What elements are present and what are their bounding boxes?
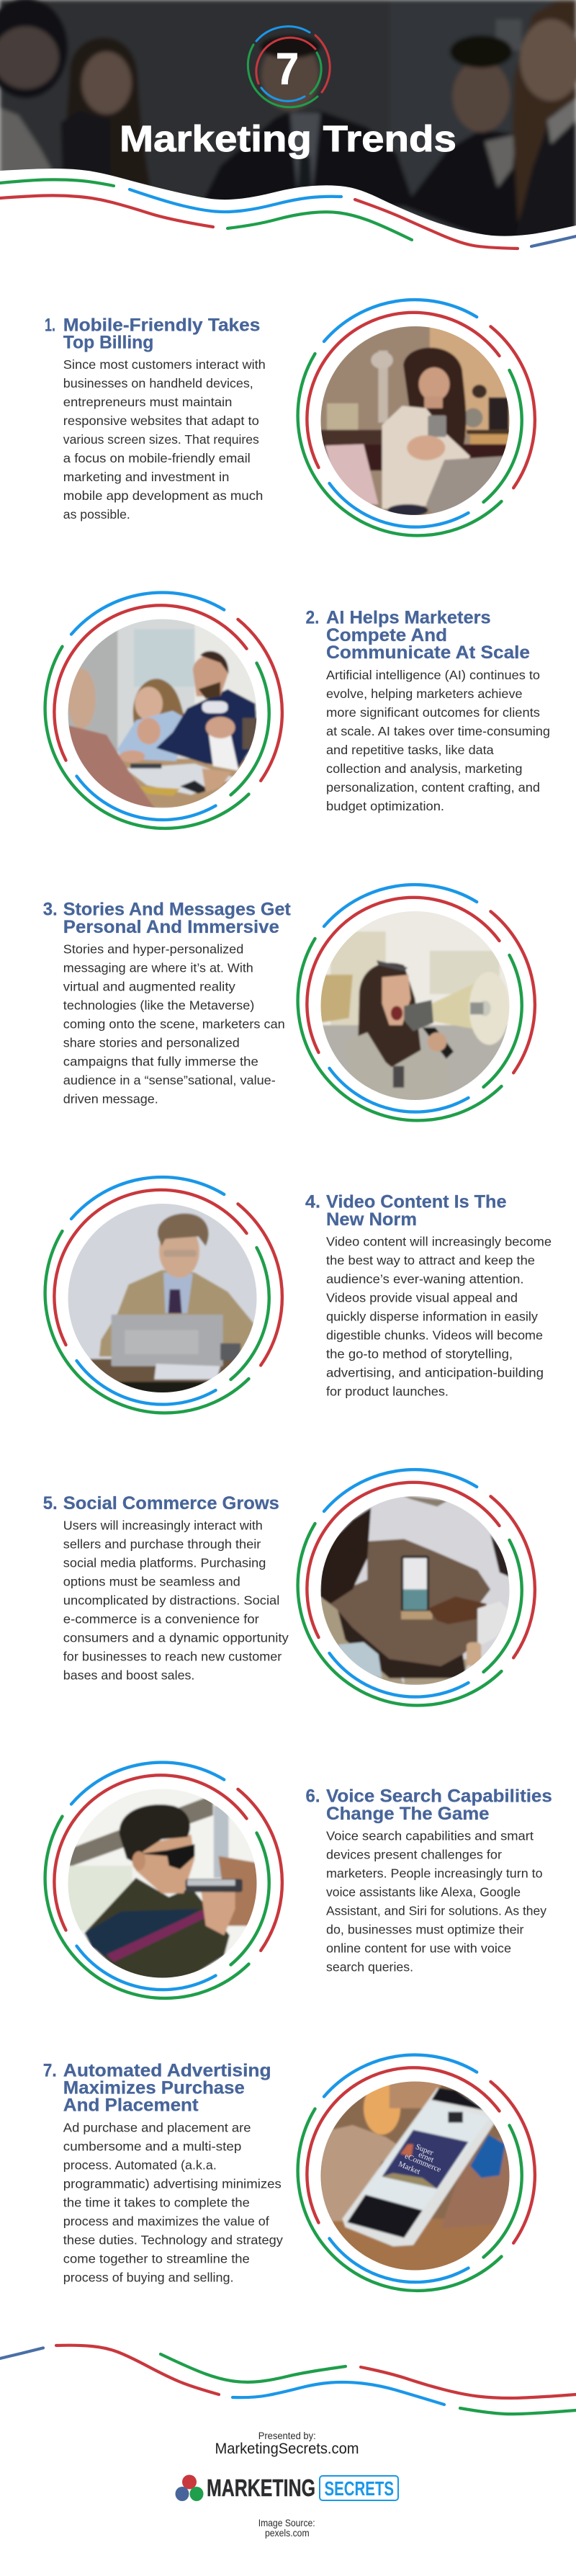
rings 2 [45,593,282,828]
section 1: mobile-friendly [45,300,535,535]
body text 3: coming onto the scene, marketers can [63,1017,285,1032]
photo 7: online shopping on phone: Super [414,2142,435,2157]
heading 1: Mobile-Friendly Takes [63,316,260,336]
logo secrets badge [320,2476,398,2500]
body text 5: Users will increasingly interact with [63,1519,263,1533]
photo 2: team meeting [68,620,256,808]
body text 1 [63,357,266,522]
header: team photo banner [0,0,576,236]
body text 1: Since most customers interact with [63,357,266,372]
body text 5: uncomplicated by distractions. Social [63,1593,279,1608]
body text 1: as possible. [63,507,130,522]
heading 3: Personal And Immersive [63,917,279,937]
title ring with number 7: 7 [276,45,299,94]
body text 5: sellers and purchase through their [63,1537,261,1552]
rings 1 [298,300,535,535]
body text 7 [63,2121,283,2285]
body text 6: online content for use with voice [326,1941,511,1955]
section 6: voice search [45,1763,552,1998]
photo 7: online shopping on phone: Market [397,2160,421,2176]
body text 7: cumbersome and a multi-step [63,2139,241,2154]
footer wave: coloured lines [0,2345,576,2414]
body text 2: personalization, content crafting, and [326,780,540,795]
body text 7: Ad purchase and placement are [63,2121,251,2135]
body text 3: Stories and hyper-personalized [63,942,243,957]
rings 6 [45,1763,282,1998]
logo secrets badge: SECRETS [324,2477,394,2500]
body text 2 [326,668,550,813]
body text 6: search queries. [326,1959,413,1974]
heading 3: Stories And Messages Get [63,900,291,920]
section 4: video [45,1177,552,1413]
title: Marketing Trends [120,118,456,159]
body text 2: collection and analysis, marketing [326,761,523,776]
body text 4: quickly disperse information in easily [326,1310,538,1324]
body text 7: the time it takes to complete the [63,2196,250,2210]
body text 5 [63,1519,289,1683]
photo 6: man speaking to phone [63,1786,264,1981]
body text 7: programmatic) advertising minimizes [63,2177,282,2191]
body text 1: entrepreneurs must maintain [63,395,232,409]
section 5: social commerce [43,1470,535,1705]
heading 2: 2. [305,608,320,628]
body text 3: driven message. [63,1092,158,1106]
body text 3: audience in a “sense”sational, value- [63,1073,276,1088]
rings 4 [45,1177,282,1413]
photo 4: man at laptop [68,1204,256,1392]
body text 6: Voice search capabilities and smart [326,1828,534,1843]
presented by [215,2430,359,2457]
body text 6: do, businesses must optimize their [326,1922,524,1936]
image source: Image Source: [258,2517,315,2528]
photo 7: online shopping on phone: ernet [417,2150,435,2165]
body text 4 [326,1235,552,1399]
heading 4: 4. [305,1192,320,1212]
photo 7: online shopping on phone [316,2080,514,2274]
body text 1: responsive websites that adapt to [63,413,259,428]
body text 7: process and maximizes the value of [63,2214,269,2229]
body text 3: share stories and personalized [63,1036,240,1050]
body text 1: marketing and investment in [63,470,229,484]
body text 7: process of buying and selling. [63,2271,233,2285]
heading 6: 6. [305,1786,320,1807]
photo 1: woman with phone [316,324,514,519]
body text 4: digestible chunks. Videos will become [326,1328,543,1343]
heading 6: Voice Search Capabilities [326,1786,552,1807]
heading 6 [305,1786,552,1824]
body text 5: bases and boost sales. [63,1668,194,1683]
rings 3 [298,885,535,1120]
body text 3: technologies (like the Metaverse) [63,998,254,1013]
body text 1: various screen sizes. That requires [63,432,259,447]
body text 5: e-commerce is a convenience for [63,1612,259,1627]
heading 4 [305,1192,507,1230]
body text 2: and repetitive tasks, like data [326,743,494,757]
body text 2: at scale. AI takes over time-consuming [326,724,550,738]
section 7: automated advertising [43,2055,535,2291]
heading 1: Top Billing [63,333,153,353]
heading 7: 7. [43,2061,57,2081]
logo icon [176,2475,203,2501]
heading 5: 5. [43,1493,58,1513]
body text 6: marketers. People increasingly turn to [326,1866,543,1880]
body text 3: campaigns that fully immerse the [63,1055,258,1069]
body text 1: mobile app development as much [63,488,263,503]
rings 7 [298,2055,535,2291]
body text 6: Assistant, and Siri for solutions. As they [326,1903,546,1918]
body text 2: evolve, helping marketers achieve [326,687,523,701]
heading 2: Communicate At Scale [326,643,530,663]
body text 1: businesses on handheld devices, [63,376,253,390]
heading 3 [43,900,291,937]
heading 2 [305,608,530,663]
body text 6: voice assistants like Alexa, Google [326,1884,521,1899]
heading 1 [45,316,260,353]
body text 5: social media platforms. Purchasing [63,1556,266,1570]
body text 2: more significant outcomes for clients [326,705,540,720]
body text 5: for businesses to reach new customer [63,1650,282,1664]
body text 4: the go-to method of storytelling, [326,1347,513,1361]
body text 4: the best way to attract and keep the [326,1253,535,1268]
body text 7: come together to streamline the [63,2252,250,2266]
body text 7: process. Automated (a.k.a. [63,2158,217,2173]
body text 3: virtual and augmented reality [63,980,235,994]
rings 5 [298,1470,535,1705]
body text 2: Artificial intelligence (AI) continues to [326,668,540,682]
body text 5: options must be seamless and [63,1575,240,1589]
heading 3: 3. [43,900,58,920]
body text 1: a focus on mobile-friendly email [63,451,251,465]
photo 5: phone on wood table [316,1493,514,1688]
logo: Marketing Secrets [176,2474,398,2501]
heading 6: Change The Game [326,1804,490,1824]
presented by: Presented by: [258,2430,316,2441]
section 2: AI [45,593,550,828]
heading 5: Social Commerce Grows [63,1493,279,1513]
body text 6 [326,1828,546,1974]
heading 4: New Norm [326,1209,417,1230]
body text 4: audience’s ever-waning attention. [326,1272,524,1287]
logo wordmark: MARKETING [207,2474,315,2501]
heading 2: AI Helps Marketers [326,608,491,628]
section 3: stories [43,885,535,1120]
body text 4: Video content will increasingly become [326,1235,552,1249]
presented by: MarketingSecrets.com [215,2441,359,2457]
body text 6: devices present challenges for [326,1847,502,1861]
body text 3: messaging are where it’s at. With [63,961,253,975]
heading 4: Video Content Is The [326,1192,507,1212]
body text 5: consumers and a dynamic opportunity [63,1631,289,1645]
heading 1: 1. [45,316,55,336]
heading 7: Automated Advertising [63,2061,271,2081]
heading 7 [43,2061,271,2116]
heading 7: Maximizes Purchase [63,2078,245,2098]
title ring with number 7 [248,27,330,107]
body text 4: for product launches. [326,1385,449,1399]
body text 7: these duties. Technology and strategy [63,2233,283,2248]
heading 7: And Placement [63,2096,199,2116]
photo 3: woman with megaphone [316,908,514,1104]
image source: pexels.com [265,2527,310,2539]
header wave: coloured lines [0,179,576,249]
body text 4: Videos provide visual appeal and [326,1291,518,1305]
heading 2: Compete And [326,625,447,645]
body text 4: advertising, and anticipation-building [326,1366,544,1380]
photo 7: online shopping on phone: eCommerce [403,2152,442,2174]
body text 2: budget optimization. [326,799,444,813]
image source [258,2517,315,2539]
body text 3 [63,942,285,1106]
